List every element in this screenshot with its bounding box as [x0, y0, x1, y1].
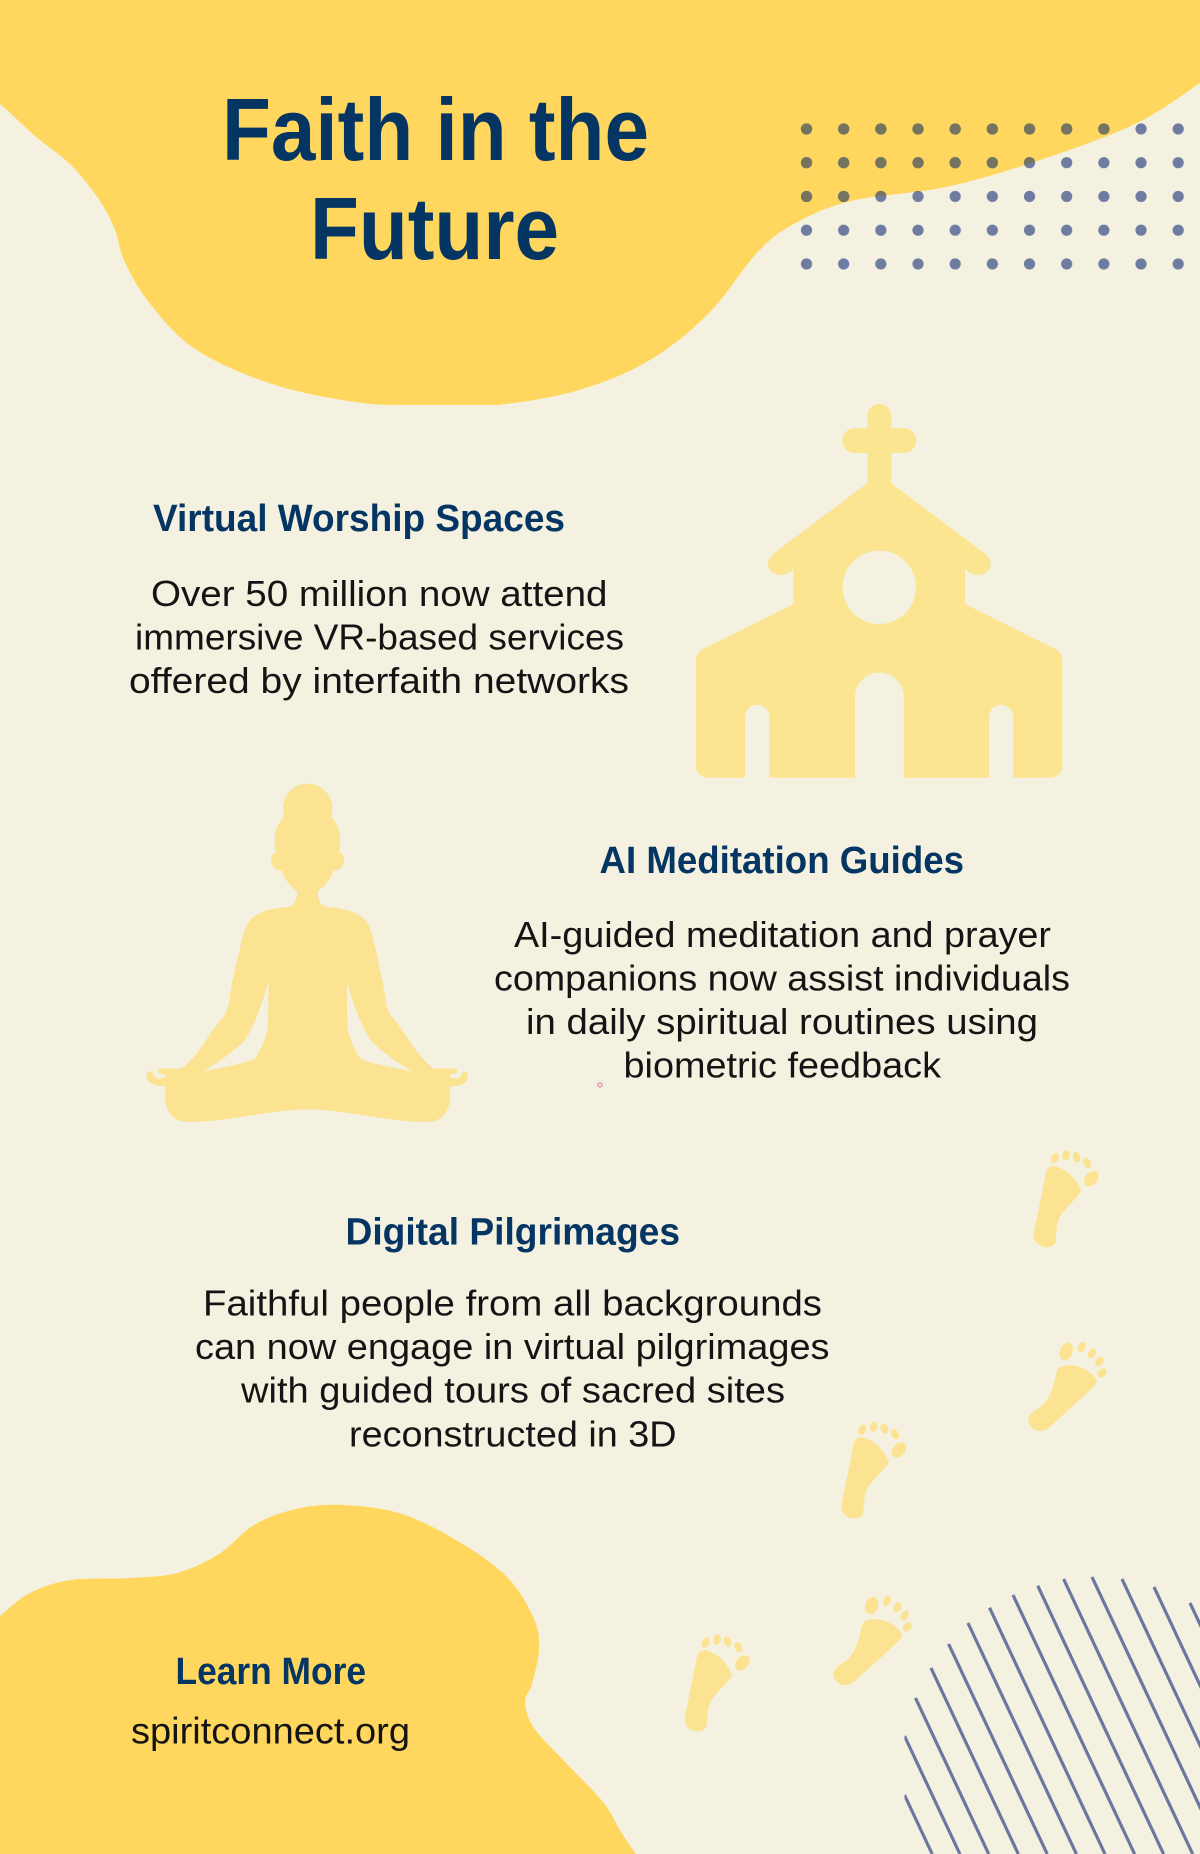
heading and text: digital pilgrimages: reconstructed in 3D [349, 1414, 676, 1454]
title: Faith in the [222, 80, 649, 179]
icon: footprint 4 [834, 1595, 914, 1685]
icon: footprint 5 [685, 1634, 752, 1731]
icon: meditating person [147, 784, 468, 1122]
heading and text: digital pilgrimages: can now engage in virtual pilgrimages [195, 1326, 830, 1367]
heading and text: virtual worship spaces: Virtual Worship Spaces [153, 498, 565, 540]
call to action: Learn More [176, 1651, 366, 1693]
dot grid decoration [800, 123, 1186, 270]
icon: footprint 1 [1034, 1149, 1101, 1247]
heading and text: digital pilgrimages: with guided tours of sacred sites [240, 1370, 785, 1410]
heading and text: virtual worship spaces: offered by interfaith networks [129, 660, 629, 701]
heading and text: virtual worship spaces: immersive VR-based services [135, 616, 624, 658]
heading and text: AI meditation guides: companions now assist individuals [494, 958, 1070, 998]
heading and text: digital pilgrimages [195, 1212, 830, 1454]
title [222, 80, 649, 278]
heading and text: AI meditation guides: AI Meditation Guides [600, 840, 964, 882]
icon: footprint 3 [841, 1421, 909, 1518]
title: Future [310, 179, 559, 278]
small pink marker [594, 1079, 606, 1091]
call to action: spiritconnect.org [131, 1710, 410, 1752]
heading and text: digital pilgrimages: Digital Pilgrimages [346, 1212, 680, 1254]
heading and text: AI meditation guides [494, 840, 1070, 1086]
heading and text: digital pilgrimages: Faithful people from all backgrounds [203, 1282, 822, 1324]
heading and text: virtual worship spaces [129, 498, 629, 701]
top yellow blob [0, 0, 1200, 405]
heading and text: AI meditation guides: in daily spiritual routines using [526, 1001, 1038, 1042]
bottom yellow blob [0, 1505, 636, 1854]
heading and text: virtual worship spaces: Over 50 million now attend [151, 573, 608, 614]
icon: church [696, 404, 1062, 778]
heading and text: AI meditation guides: biometric feedback [624, 1044, 942, 1086]
icon: footprint 2 [1028, 1341, 1108, 1431]
heading and text: AI meditation guides: AI-guided meditation and prayer [514, 914, 1051, 955]
hatched circle decoration [904, 1577, 1200, 1854]
call to action [131, 1651, 410, 1752]
